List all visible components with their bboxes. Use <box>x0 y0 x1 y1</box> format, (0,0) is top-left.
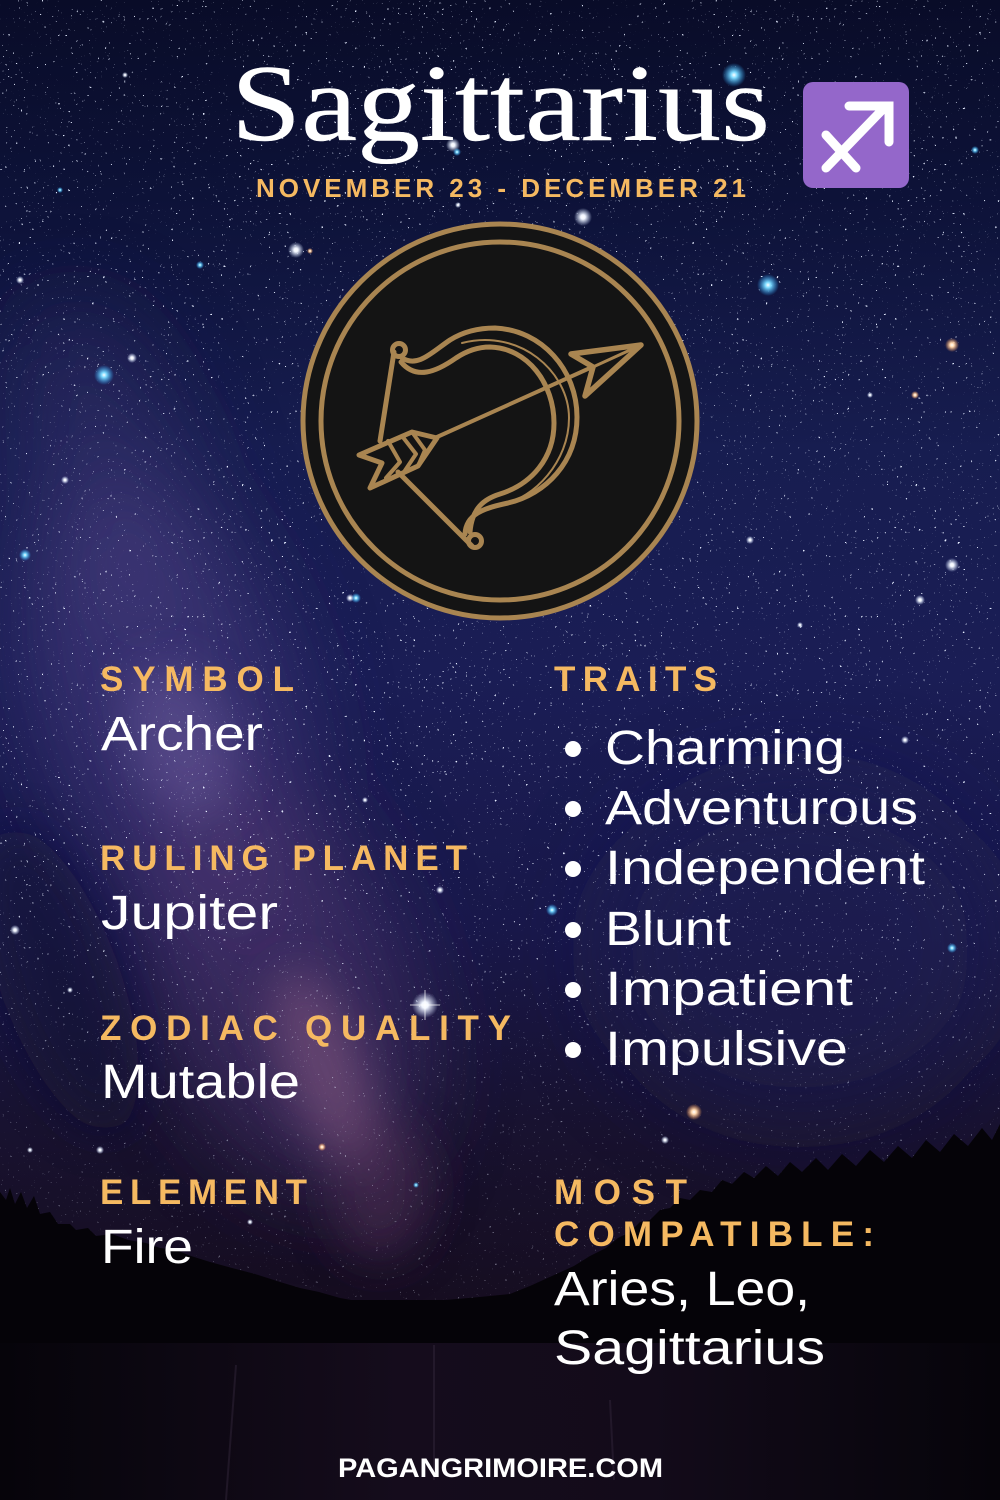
field: most compatible: MOST <box>554 1173 687 1212</box>
traits heading: TRAITS <box>554 660 717 699</box>
traits list: Independent <box>605 842 925 895</box>
field: ruling planet <box>100 839 467 940</box>
traits list: Adventurous <box>605 782 918 835</box>
icon: sagittarius emoji <box>803 82 909 188</box>
field: element: Fire <box>101 1221 193 1274</box>
traits list: Impatient <box>605 963 853 1016</box>
field: most compatible <box>554 1173 874 1375</box>
field: symbol: Archer <box>101 708 263 761</box>
title: Sagittarius <box>231 43 770 164</box>
date range: NOVEMBER 23 - DECEMBER 21 <box>256 173 746 203</box>
field: element: ELEMENT <box>100 1173 307 1212</box>
landscape: tree silhouette and lake <box>0 1124 1000 1500</box>
traits list: Blunt <box>605 903 731 956</box>
traits list: Charming <box>605 722 845 775</box>
field: ruling planet: RULING PLANET <box>100 839 467 878</box>
icon: bow <box>380 328 577 548</box>
field: element <box>100 1173 307 1274</box>
icon: arrow <box>359 345 641 488</box>
traits list <box>565 722 925 1076</box>
field: most compatible: Sagittarius <box>554 1322 825 1375</box>
bright stars <box>10 63 979 1225</box>
emblem: bow and arrow badge <box>303 224 697 618</box>
field: zodiac quality: Mutable <box>101 1056 300 1109</box>
field: symbol: SYMBOL <box>100 660 294 699</box>
field: zodiac quality: ZODIAC QUALITY <box>100 1009 511 1048</box>
traits list: Impulsive <box>605 1023 848 1076</box>
field: zodiac quality <box>100 1009 511 1109</box>
field: most compatible: COMPATIBLE: <box>554 1215 874 1254</box>
field: symbol <box>100 660 294 761</box>
footer: website: PAGANGRIMOIRE.COM <box>338 1453 663 1483</box>
field: most compatible: Aries, Leo, <box>554 1263 810 1316</box>
field: ruling planet: Jupiter <box>101 887 278 940</box>
